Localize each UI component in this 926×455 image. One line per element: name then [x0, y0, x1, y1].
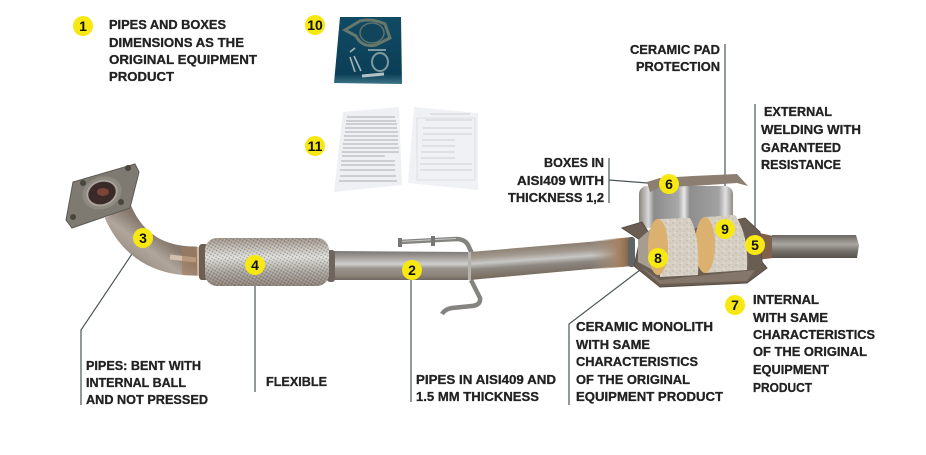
catalytic converter [622, 174, 859, 287]
label: pipes bent: AND NOT PRESSED [86, 392, 208, 407]
label: boxes in AISI409: BOXES IN [544, 155, 604, 170]
outlet pipe [755, 232, 859, 260]
callout 1: dimensions: PRODUCT [109, 69, 174, 84]
main pipe [330, 237, 632, 280]
badge 9 [715, 219, 735, 239]
label: boxes in AISI409: THICKNESS 1,2 [508, 190, 604, 205]
label: external welding: RESISTANCE [761, 157, 841, 172]
badge 6: 6 [665, 176, 673, 192]
badge 3: 3 [139, 230, 147, 246]
label: ceramic pad protection: PROTECTION [636, 59, 720, 74]
flange [66, 164, 139, 228]
lower housing [622, 218, 767, 287]
label: flexible: FLEXIBLE [266, 374, 327, 389]
callout 1: dimensions: PIPES AND BOXES [109, 17, 226, 32]
callout 7: internal: OF THE ORIGINAL [753, 344, 867, 359]
badge 11: 11 [308, 138, 323, 154]
badge 9: 9 [721, 221, 729, 237]
label: external welding [761, 104, 861, 172]
callout 7: internal: CHARACTERISTICS [753, 327, 875, 342]
label: pipes in AISI409 [416, 372, 556, 404]
label: boxes in AISI409 [508, 155, 604, 205]
label: pipes bent [86, 358, 208, 407]
badge 10 [305, 15, 325, 35]
image: documents [334, 107, 478, 192]
label: boxes in AISI409: AISI409 WITH [517, 173, 604, 188]
label: pipes bent: PIPES: BENT WITH [86, 358, 201, 373]
inlet collar [628, 237, 635, 267]
heat shield top [647, 174, 748, 192]
front pipe with bend [118, 212, 200, 276]
callout 7: internal: INTERNAL [753, 292, 819, 307]
badge 4: 4 [251, 257, 259, 273]
label: external welding: GARANTEED [761, 140, 841, 155]
callout 1: dimensions: 1 [79, 18, 87, 34]
monolith 2 [695, 215, 747, 273]
callout 7: internal: PRODUCT [753, 380, 812, 395]
label: ceramic monolith: CHARACTERISTICS [576, 354, 698, 369]
callout 1: dimensions: DIMENSIONS AS THE [109, 35, 244, 50]
badge 2 [402, 260, 422, 280]
callout 7: internal: 7 [731, 297, 739, 313]
label: external welding: WELDING WITH [761, 122, 861, 137]
callout 1: dimensions: ORIGINAL EQUIPMENT [109, 52, 257, 67]
badge 8: 8 [654, 250, 662, 266]
label: pipes bent: INTERNAL BALL [86, 375, 186, 390]
badge 11 [305, 136, 325, 156]
label: ceramic monolith: WITH SAME [576, 337, 650, 352]
label: ceramic monolith: EQUIPMENT PRODUCT [576, 389, 723, 404]
badge 5: 5 [751, 237, 759, 253]
inner canister [639, 186, 733, 228]
badge 8 [648, 248, 668, 268]
callout 7: internal [725, 292, 875, 395]
badge 5 [745, 235, 765, 255]
callout 7: internal: EQUIPMENT [753, 362, 829, 377]
label: ceramic monolith: CERAMIC MONOLITH [576, 319, 713, 334]
monolith 1 [648, 218, 698, 277]
label: ceramic monolith: OF THE ORIGINAL [576, 372, 690, 387]
flexible mesh section [199, 238, 335, 286]
callout 7: internal: WITH SAME [753, 310, 828, 325]
label: ceramic pad protection [630, 42, 720, 74]
callout 1: dimensions [73, 16, 257, 84]
badge 10: 10 [307, 17, 323, 33]
badge 4 [245, 255, 265, 275]
label: external welding: EXTERNAL [764, 104, 832, 119]
leader lines [81, 44, 755, 405]
thin side tube [398, 236, 480, 314]
label: ceramic monolith [576, 319, 723, 404]
label: pipes in AISI409: PIPES IN AISI409 AND [416, 372, 556, 387]
label: pipes in AISI409: 1.5 MM THICKNESS [416, 389, 539, 404]
image: gasket bag [334, 17, 402, 84]
badge 2: 2 [408, 262, 416, 278]
label: ceramic pad protection: CERAMIC PAD [630, 42, 720, 57]
badge 6 [659, 174, 679, 194]
badge 3 [133, 228, 153, 248]
